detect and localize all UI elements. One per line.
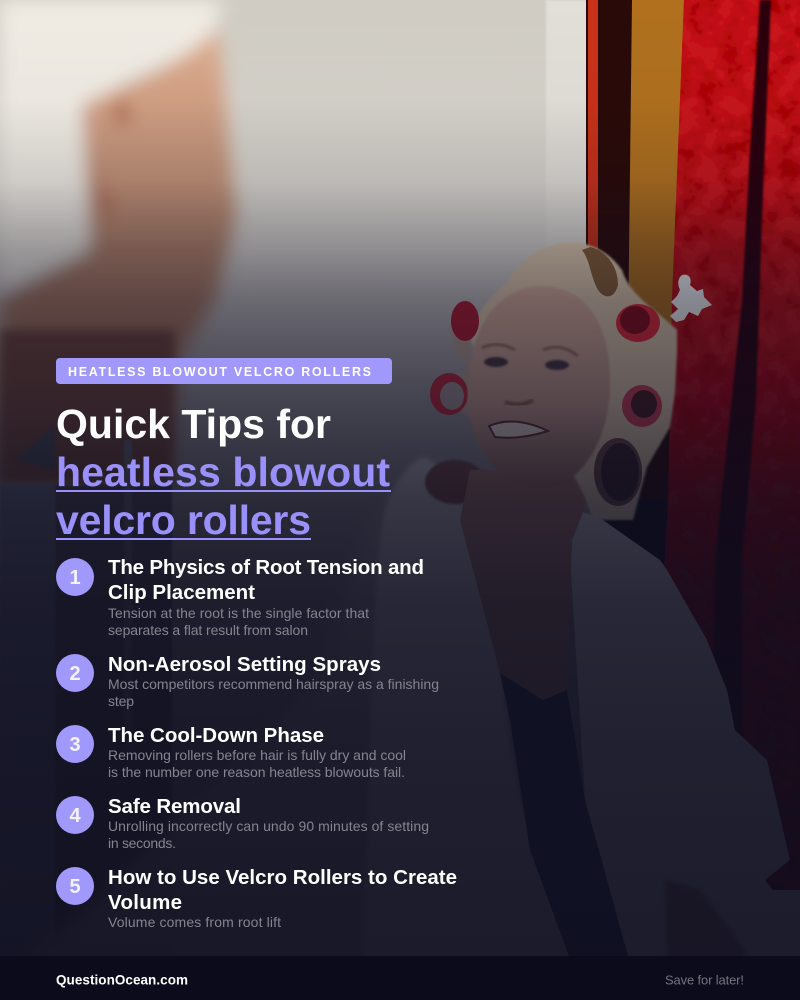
gold curtain strip — [586, 0, 686, 500]
tip 2: Most competitors recommend hairspray as a finishing — [108, 676, 439, 692]
tag pill — [56, 358, 392, 384]
tip 5 — [56, 866, 457, 930]
tip 3: is the number one reason heatless blowouts fail. — [108, 764, 405, 780]
tip 5: Volume comes from root lift — [108, 914, 281, 930]
tip 1: Tension at the root is the single factor that — [108, 605, 369, 621]
main title: velcro rollers — [56, 497, 311, 543]
tip 2: 2 — [69, 663, 81, 685]
rollers — [430, 301, 662, 506]
tip 5: 5 — [69, 876, 81, 898]
hand — [665, 880, 745, 1000]
main title: Quick Tips for — [56, 401, 331, 447]
tip 1: The Physics of Root Tension and — [108, 556, 424, 579]
camisole — [500, 673, 640, 1000]
red velvet curtain — [640, 0, 800, 1000]
tip 1 — [56, 556, 424, 638]
tip 1: separates a flat result from salon — [108, 622, 308, 638]
robe — [0, 457, 800, 1000]
tip 1: Clip Placement — [108, 581, 255, 604]
tag pill: HEATLESS BLOWOUT VELCRO ROLLERS — [68, 365, 371, 379]
tip 3 — [56, 724, 406, 780]
tip 4: in seconds. — [108, 835, 176, 851]
tip 2 — [56, 653, 439, 709]
tip 4: Unrolling incorrectly can undo 90 minutes of setting — [108, 818, 429, 834]
left lower background — [0, 330, 175, 1000]
face — [468, 286, 610, 488]
tip 2: step — [108, 693, 134, 709]
footer bar — [0, 956, 800, 1000]
shoulder shadow — [425, 460, 485, 504]
tip 4 — [56, 795, 429, 851]
tip 3: Removing rollers before hair is fully dry and cool — [108, 747, 406, 763]
tip 3: 3 — [69, 734, 81, 756]
site name: QuestionOcean.com — [56, 972, 188, 988]
main title — [56, 401, 391, 543]
blurred foreground figure — [0, 0, 236, 480]
tip 1: 1 — [69, 567, 81, 589]
door frame — [546, 0, 590, 400]
tip 3: The Cool-Down Phase — [108, 724, 324, 747]
save for later: Save for later! — [665, 972, 744, 988]
tip 2: Non-Aerosol Setting Sprays — [108, 653, 381, 676]
main title: heatless blowout — [56, 449, 390, 495]
wall — [0, 0, 600, 1000]
neck and chest skin — [460, 470, 600, 700]
tip 5: Volume — [108, 891, 182, 914]
hair — [440, 243, 677, 520]
leaf ornament — [670, 275, 712, 322]
tip 4: 4 — [69, 805, 81, 827]
tip 5: How to Use Velcro Rollers to Create — [108, 866, 457, 889]
tip 4: Safe Removal — [108, 795, 241, 818]
